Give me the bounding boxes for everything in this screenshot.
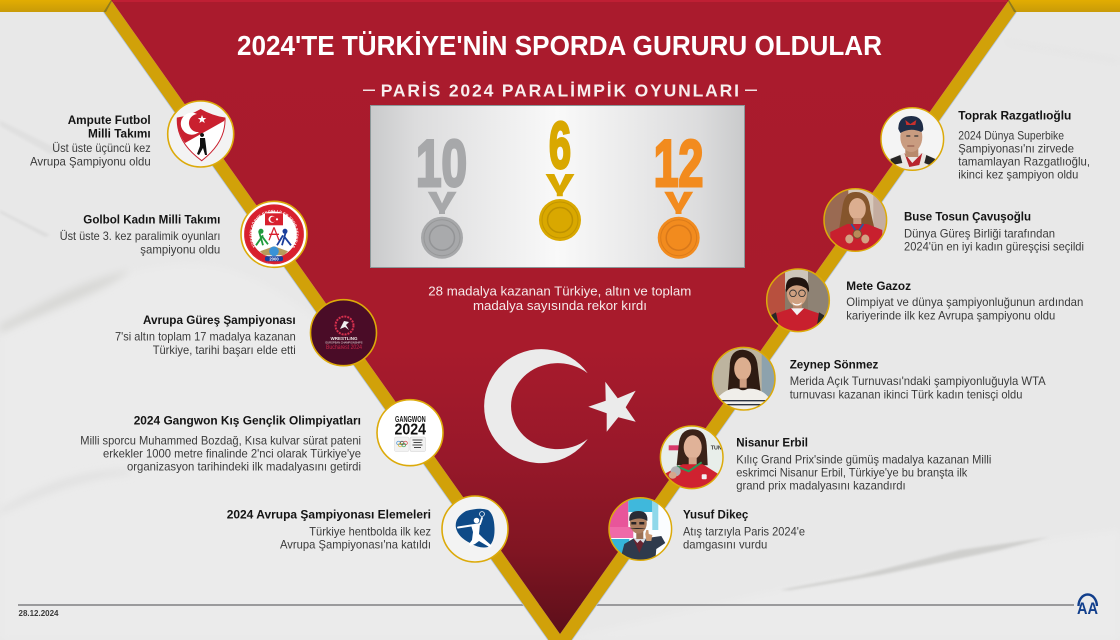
text: Zeynep Sönmez: turnuvası kazanan ikinci Türk kadın tenisçi oldu xyxy=(790,388,1022,401)
text: Nisanur Erbil: Nisanur Erbil xyxy=(736,435,808,449)
silver medal count xyxy=(416,126,467,259)
item: Ampute Futbol xyxy=(30,101,234,169)
text: Elemeler: Türkiye hentbolda ilk kez xyxy=(309,526,431,539)
text: Yusuf Dikeç: Atış tarzıyla Paris 2024'e xyxy=(683,525,805,538)
text: Ampute Futbol: Ampute Futbol xyxy=(68,113,151,127)
text: Gangwon: erkekler 1000 metre finalinde 2'nci olarak Türkiye'ye xyxy=(103,447,361,460)
text: Toprak Razgatlıoğlu xyxy=(958,108,1090,181)
text: Nisanur Erbil xyxy=(736,435,991,493)
item: Golbol xyxy=(60,200,308,268)
item: Yusuf Dikeç xyxy=(609,498,805,560)
text: Zeynep Sönmez: Zeynep Sönmez xyxy=(790,357,878,371)
text: Nisanur Erbil: grand prix madalyasını kazandırdı xyxy=(736,480,906,493)
icon: goalball federation logo: 2000 xyxy=(269,256,279,261)
item: Mete Gazoz xyxy=(767,269,1083,332)
icon: handball pictogram xyxy=(442,496,508,562)
text: Mete Gazoz: Mete Gazoz xyxy=(846,279,911,293)
text: Gangwon: organizasyon tarihindeki ilk madalyasını getirdi xyxy=(127,460,361,473)
icon: goalball federation logo: TÜRKİYE GÖRME ENGELLİLER SPOR FEDERASYONU xyxy=(249,210,298,248)
item: Gangwon xyxy=(80,400,443,473)
text: Zeynep Sönmez: Merida Açık Turnuvası'ndaki şampiyonluğuyla WTA xyxy=(790,375,1046,388)
text: Golbol: Üst üste 3. kez paralimik oyunları xyxy=(60,230,220,243)
red triangle xyxy=(111,0,1009,634)
text: Gangwon: 2024 Gangwon Kış Gençlik Olimpiyatları xyxy=(134,413,361,427)
bronze medal count: 12 xyxy=(654,126,703,200)
item: Elemeler xyxy=(227,496,508,562)
gold medal count xyxy=(539,108,581,241)
silver medal count: 10 xyxy=(416,126,467,200)
text: Toprak Razgatlıoğlu: 2024 Dünya Superbike xyxy=(958,129,1064,142)
text: Avrupa Güreş xyxy=(115,313,296,357)
text: Elemeler xyxy=(227,507,431,552)
photo: Toprak xyxy=(881,108,944,170)
photo: Mete xyxy=(767,269,829,332)
caption: medal record: 28 madalya kazanan Türkiye, altın ve toplam xyxy=(428,284,691,299)
photo: Zeynep xyxy=(712,347,775,410)
logo: AA xyxy=(1077,594,1098,618)
text: Golbol: şampiyonu oldu xyxy=(140,244,220,257)
text: Zeynep Sönmez xyxy=(790,357,1046,401)
text: Golbol xyxy=(60,212,220,257)
text: Avrupa Güreş: 7'si altın toplam 17 madalya kazanan xyxy=(115,331,296,344)
text: Yusuf Dikeç xyxy=(683,507,805,551)
item: Avrupa Güreş xyxy=(115,300,376,366)
photo: Yusuf xyxy=(609,498,672,560)
text: Gangwon: Milli sporcu Muhammed Bozdağ, Kısa kulvar sürat pateni xyxy=(80,434,361,447)
icon: crescent and star xyxy=(484,349,636,463)
footer rule xyxy=(18,604,1074,606)
text: Golbol: Golbol Kadın Milli Takımı xyxy=(83,212,220,226)
panel: medal counts xyxy=(370,106,744,268)
icon: wrestling Bucharest logo: Bucharest 2024 xyxy=(326,345,363,351)
icon: Gangwon 2024 logo: 2024 xyxy=(394,421,426,438)
gold medal count: 6 xyxy=(549,108,571,182)
title: 2024'TE TÜRKİYE'NİN SPORDA GURURU OLDULAR xyxy=(237,30,882,61)
icon: wrestling Bucharest logo xyxy=(310,300,376,366)
text: Buse: 2024'ün en iyi kadın güreşçisi seçildi xyxy=(904,241,1084,254)
text: Mete Gazoz: Olimpiyat ve dünya şampiyonluğunun ardından xyxy=(846,296,1083,309)
top gold bars xyxy=(0,0,1120,12)
item: Toprak Razgatlıoğlu xyxy=(881,108,1090,181)
text: Elemeler: Avrupa Şampiyonası'na katıldı xyxy=(280,539,431,552)
date: 28.12.2024 xyxy=(18,608,59,618)
caption: medal record xyxy=(428,284,691,313)
text: Mete Gazoz xyxy=(846,279,1083,322)
text: Yusuf Dikeç: Yusuf Dikeç xyxy=(683,507,748,521)
logo: AA: AA xyxy=(1077,600,1098,618)
icon: wrestling Bucharest logo: WRESTLING xyxy=(330,336,358,341)
item: Zeynep Sönmez xyxy=(712,347,1046,410)
item: Buse Tosun Çavuşoğlu xyxy=(824,189,1084,254)
text: Elemeler: 2024 Avrupa Şampiyonası Elemeleri xyxy=(227,507,431,521)
text: Buse xyxy=(904,209,1084,254)
icon: goalball federation logo xyxy=(240,200,308,268)
photo: Nisanur xyxy=(660,426,723,489)
item: Nisanur Erbil xyxy=(660,426,991,493)
text: Ampute Futbol: Üst üste üçüncü kez xyxy=(52,142,151,155)
text: Yusuf Dikeç: damgasını vurdu xyxy=(683,538,767,551)
text: Toprak Razgatlıoğlu: Şampiyonası'nı zirvede xyxy=(958,142,1074,155)
text: Gangwon xyxy=(80,413,361,473)
text: Ampute Futbol: Avrupa Şampiyonu oldu xyxy=(30,156,151,169)
subtitle: PARİS 2024 PARALİMPİK OYUNLARI xyxy=(381,81,739,101)
text: Toprak Razgatlıoğlu: tamamlayan Razgatlıoğlu, xyxy=(958,155,1090,168)
icon: wrestling Bucharest logo: EUROPEAN CHAMPIONSHIPS xyxy=(325,340,363,344)
icon: Gangwon 2024 logo: GANGWON xyxy=(395,414,426,424)
text: Toprak Razgatlıoğlu: Toprak Razgatlıoğlu xyxy=(958,108,1071,122)
icon: Gangwon 2024 logo xyxy=(377,400,443,466)
text: Mete Gazoz: kariyerinde ilk kez Avrupa şampiyonu oldu xyxy=(846,309,1055,322)
text: Nisanur Erbil: eskrimci Nisanur Erbil, Türkiye'ye bu branşta ilk xyxy=(736,467,967,480)
text: Toprak Razgatlıoğlu: ikinci kez şampiyon oldu xyxy=(958,168,1078,181)
photo: Nisanur: TUN xyxy=(711,445,722,451)
text: Buse: Buse Tosun Çavuşoğlu xyxy=(904,209,1031,223)
text: Ampute Futbol: Milli Takımı xyxy=(88,127,151,141)
bronze medal count xyxy=(654,126,703,259)
text: Avrupa Güreş: Avrupa Güreş Şampiyonası xyxy=(143,313,296,327)
photo: Buse xyxy=(824,189,887,251)
icon: football shield xyxy=(168,101,234,167)
caption: medal record: madalya sayısında rekor kırdı xyxy=(473,298,647,313)
text: Nisanur Erbil: Kılıç Grand Prix'sinde gümüş madalya kazanan Milli xyxy=(736,454,991,467)
text: Avrupa Güreş: Türkiye, tarihi başarı elde etti xyxy=(153,344,296,357)
text: Buse: Dünya Güreş Birliği tarafından xyxy=(904,227,1055,240)
text: Ampute Futbol xyxy=(30,113,151,169)
